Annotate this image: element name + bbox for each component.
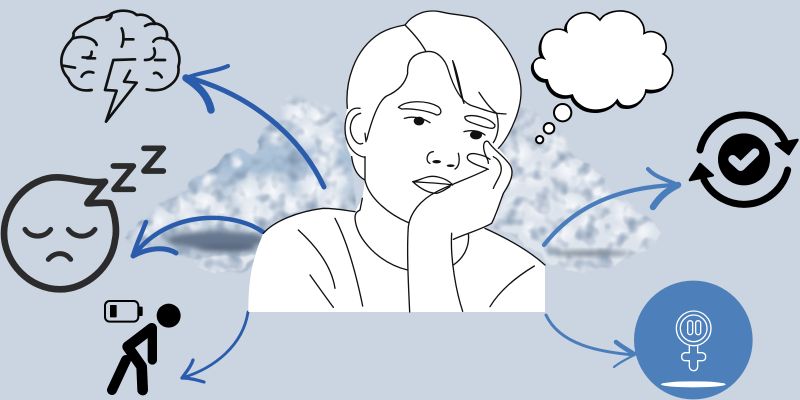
arm and hand [408,141,512,312]
hair strands [453,61,497,113]
nose [427,152,459,169]
battery [105,301,138,322]
hair outline [347,11,521,148]
icon: hormone circle with female symbol [634,281,753,399]
icon: brain with lightning bolt [61,11,179,122]
cloud: left [125,95,360,273]
icon: sleeping face [4,148,163,289]
bubble body [533,11,673,110]
icon: fatigued person with low battery [105,301,181,390]
lips [413,176,453,193]
closed eyes and frown [25,229,95,259]
white silhouette [248,11,545,312]
arrow: to sleep icon [133,218,263,256]
pupils and nostrils [414,117,482,167]
hair parting and fringe [367,25,506,143]
arrow: to brain icon [186,66,324,187]
cloud: right [490,97,662,272]
shoulder and sleeve lines [263,208,545,307]
sleep letters [113,148,163,189]
face outline [4,177,116,289]
arrow: to recovery cycle icon [544,169,678,245]
bubble trail [536,104,571,143]
figure [157,304,181,328]
icon: recovery cycle with check mark [690,115,797,204]
eyelids [404,117,485,135]
cloud shadow band: left [167,231,267,252]
person illustration [248,11,545,312]
arrow: to fatigue icon [182,312,248,382]
bubble shadow [532,13,671,112]
thought bubble [532,11,673,143]
arrow: to hormone icon [546,315,634,367]
jaw and neck [352,157,469,270]
eyebrows [398,102,495,128]
cloud shadow band: right [550,251,630,256]
ear [345,108,366,157]
